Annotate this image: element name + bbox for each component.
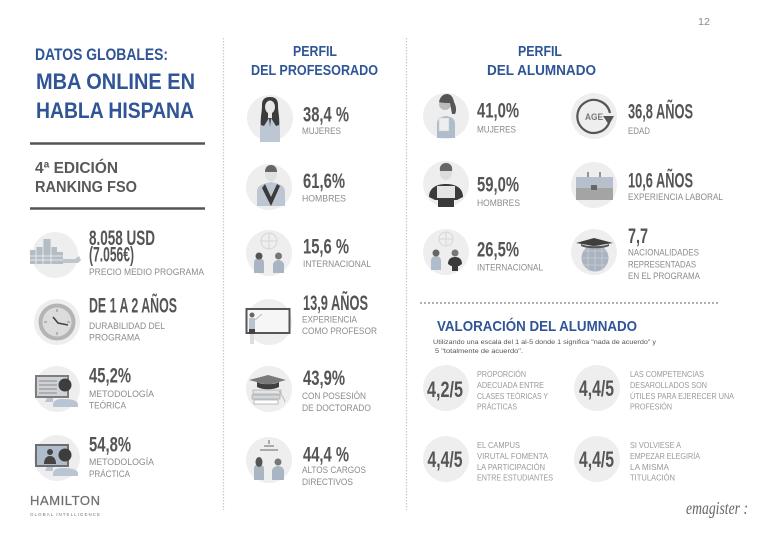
stat: hombres: 59,0% xyxy=(477,174,519,196)
stat: internacional xyxy=(303,236,371,269)
stat: internacional xyxy=(477,238,543,272)
stat: precio medio xyxy=(89,227,204,277)
scale note: Utilizando una escala del 1 al-5 donde 1 significa "nada de acuerdo" y xyxy=(433,339,657,346)
heading: VALORACIÓN DEL ALUMNADO xyxy=(437,317,637,335)
subtitle: edición: 4ª EDICIÓN xyxy=(35,158,118,177)
stat: hombres xyxy=(302,170,346,204)
page number: 12 xyxy=(698,17,710,28)
icon: hierarchy with people xyxy=(246,437,292,483)
title: MBA ONLINE EN xyxy=(36,69,195,94)
heading: PERFIL xyxy=(293,44,337,60)
icon: man xyxy=(246,164,292,210)
stat: metodología teórica: 45,2% xyxy=(89,364,131,388)
scale note: 5 "totalmente de acuerdo". xyxy=(435,348,523,355)
stat: mujeres xyxy=(302,104,349,136)
stat: mujeres: 38,4 % xyxy=(303,104,349,126)
rating: competencias: DESAROLLADOS SON xyxy=(630,380,707,390)
panel: valoración del alumnado xyxy=(423,317,734,482)
stat: cargos directivos: ALTOS CARGOS xyxy=(302,465,366,475)
icon: clock xyxy=(34,299,80,345)
stat: cargos directivos: DIRECTIVOS xyxy=(302,477,353,487)
stat: experiencia laboral: EXPERIENCIA LABORAL xyxy=(628,192,723,202)
stat: hombres xyxy=(477,174,520,208)
rating: competencias: LAS COMPETENCIAS xyxy=(630,369,704,379)
icon: buildings and chart xyxy=(30,232,81,278)
stat: internacional: 15,6 % xyxy=(303,236,349,258)
stat: experiencia laboral: 10,6 AÑOS xyxy=(628,170,693,192)
stat: nacionalidades: EN EL PROGRAMA xyxy=(628,271,700,281)
stat: durabilidad: DE 1 A 2 AÑOS xyxy=(89,294,177,318)
rating: campus: VIRUTAL FOMENTA xyxy=(477,451,548,461)
icon: teoría screen xyxy=(34,366,80,412)
stat: durabilidad xyxy=(89,294,177,342)
icon: blackboard xyxy=(246,299,292,345)
stat: nacionalidades: NACIONALIDADES xyxy=(628,248,699,258)
logo: Hamilton: HAMILTON xyxy=(30,493,100,508)
logo: emagister: emagister : xyxy=(686,498,748,518)
rating: titulación xyxy=(574,436,700,482)
stat: nacionalidades: REPRESENTADAS xyxy=(628,260,696,270)
rating: competencias: ÚTILES PARA EJERECER UNA xyxy=(630,391,734,401)
title: DATOS GLOBALES: xyxy=(35,46,168,64)
stat: precio medio: PRECIO MEDIO PROGRAMA xyxy=(89,267,204,277)
rating: competencias: PROFESIÓN xyxy=(630,402,672,412)
stat: metodología práctica: 54,8% xyxy=(89,434,131,456)
rating: titulación: SI VOLVIESE A xyxy=(630,440,681,450)
stat: internacional: 26,5% xyxy=(477,238,519,262)
logo: Hamilton: GLOBAL INTELLIGENCE xyxy=(30,512,100,517)
panel: datos globales xyxy=(30,46,205,517)
subtitle: edición xyxy=(35,158,137,196)
rating: proporción xyxy=(423,365,548,412)
stat: experiencia: COMO PROFESOR xyxy=(302,326,377,336)
rating: competencias xyxy=(574,365,734,412)
rating: campus: LA PARTICIPACIÓN xyxy=(477,462,545,472)
icon: mortarboard on books xyxy=(246,366,292,412)
stat: nacionalidades xyxy=(628,225,700,281)
stat: experiencia: EXPERIENCIA xyxy=(302,314,357,324)
stat: mujeres: MUJERES xyxy=(477,124,516,134)
icon: man student xyxy=(423,161,469,207)
stat: edad xyxy=(628,100,693,136)
scale note xyxy=(433,339,657,355)
stat: mujeres: MUJERES xyxy=(302,126,341,136)
heading: PERFIL xyxy=(518,44,562,60)
rating: campus: 4,4/5 xyxy=(428,447,462,472)
stat: doctorado: 43,9% xyxy=(303,367,345,390)
stat: metodología práctica: METODOLOGÍA xyxy=(89,457,154,467)
rating: proporción: ADECUADA ENTRE xyxy=(477,380,544,390)
heading xyxy=(251,44,378,79)
stat: edad: 36,8 AÑOS xyxy=(628,100,693,124)
rating: campus xyxy=(423,436,553,482)
rating: campus: ENTRE ESTUDIANTES xyxy=(477,472,553,482)
title: HABLA HISPANA xyxy=(36,98,194,123)
icon: mortarboard globe xyxy=(571,229,617,275)
stat: cargos directivos: 44,4 % xyxy=(303,444,349,466)
stat: durabilidad: DURABILIDAD DEL xyxy=(89,321,165,331)
rating: titulación: EMPEZAR ELEGIRÍA xyxy=(630,451,700,461)
stat: metodología teórica: METODOLOGÍA xyxy=(89,389,154,399)
icon: age: AGE xyxy=(585,112,603,123)
stat: mujeres xyxy=(477,100,519,134)
rating: campus: EL CAMPUS xyxy=(477,440,520,450)
stat: cargos directivos xyxy=(302,444,366,487)
panel: perfil del alumnado xyxy=(423,44,723,281)
stat: metodología teórica: TEÓRICA xyxy=(89,400,126,410)
stat: precio medio: (7.056€) xyxy=(89,244,134,266)
stat: precio medio: 8.058 USD xyxy=(89,227,155,250)
stat: metodología práctica xyxy=(89,434,154,479)
rating: competencias: 4,4/5 xyxy=(579,376,614,401)
icon: woman xyxy=(247,95,293,142)
rating: proporción: CLASES TEÓRICAS Y xyxy=(477,391,548,401)
icon: international staff xyxy=(246,230,292,276)
logo: Hamilton xyxy=(30,493,100,517)
subtitle: edición: RANKING FSO xyxy=(35,179,137,196)
panel: perfil del profesorado xyxy=(246,44,378,487)
stat: doctorado xyxy=(302,367,371,413)
rating: titulación: TITULACIÓN xyxy=(630,472,675,482)
heading: DEL ALUMNADO xyxy=(487,63,596,79)
stat: hombres: 61,6% xyxy=(303,170,345,193)
stat: mujeres: 41,0% xyxy=(477,100,519,122)
icon: age xyxy=(571,93,617,139)
rating: titulación: LA MISMA xyxy=(630,462,669,472)
icon: international students xyxy=(423,229,469,275)
rating: proporción: PRÁCTICAS xyxy=(477,402,517,412)
stat: edad: EDAD xyxy=(628,126,650,136)
icon: práctica screen xyxy=(34,435,80,481)
stat: hombres: HOMBRES xyxy=(477,198,520,208)
rating: proporción: PROPORCIÓN xyxy=(477,369,526,379)
stat: internacional: INTERNACIONAL xyxy=(477,262,543,272)
stat: experiencia laboral xyxy=(628,170,723,202)
stat: doctorado: DE DOCTORADO xyxy=(302,403,371,413)
stat: internacional: INTERNACIONAL xyxy=(303,259,371,269)
rating: proporción: 4,2/5 xyxy=(427,377,463,402)
stat: nacionalidades: 7,7 xyxy=(628,225,648,248)
stat: metodología teórica xyxy=(89,364,154,410)
stat: durabilidad: PROGRAMA xyxy=(89,332,140,342)
stat: hombres: HOMBRES xyxy=(302,194,346,204)
stat: doctorado: CON POSESIÓN xyxy=(302,391,366,401)
rating: titulación: 4,4/5 xyxy=(579,447,614,472)
icon: briefcase xyxy=(571,162,617,208)
title xyxy=(35,46,195,123)
heading: DEL PROFESORADO xyxy=(251,63,378,79)
icon: woman student xyxy=(423,93,469,139)
heading xyxy=(487,44,596,79)
stat: metodología práctica: PRÁCTICA xyxy=(89,469,130,479)
stat: experiencia xyxy=(302,292,377,336)
stat: experiencia: 13,9 AÑOS xyxy=(303,292,368,315)
